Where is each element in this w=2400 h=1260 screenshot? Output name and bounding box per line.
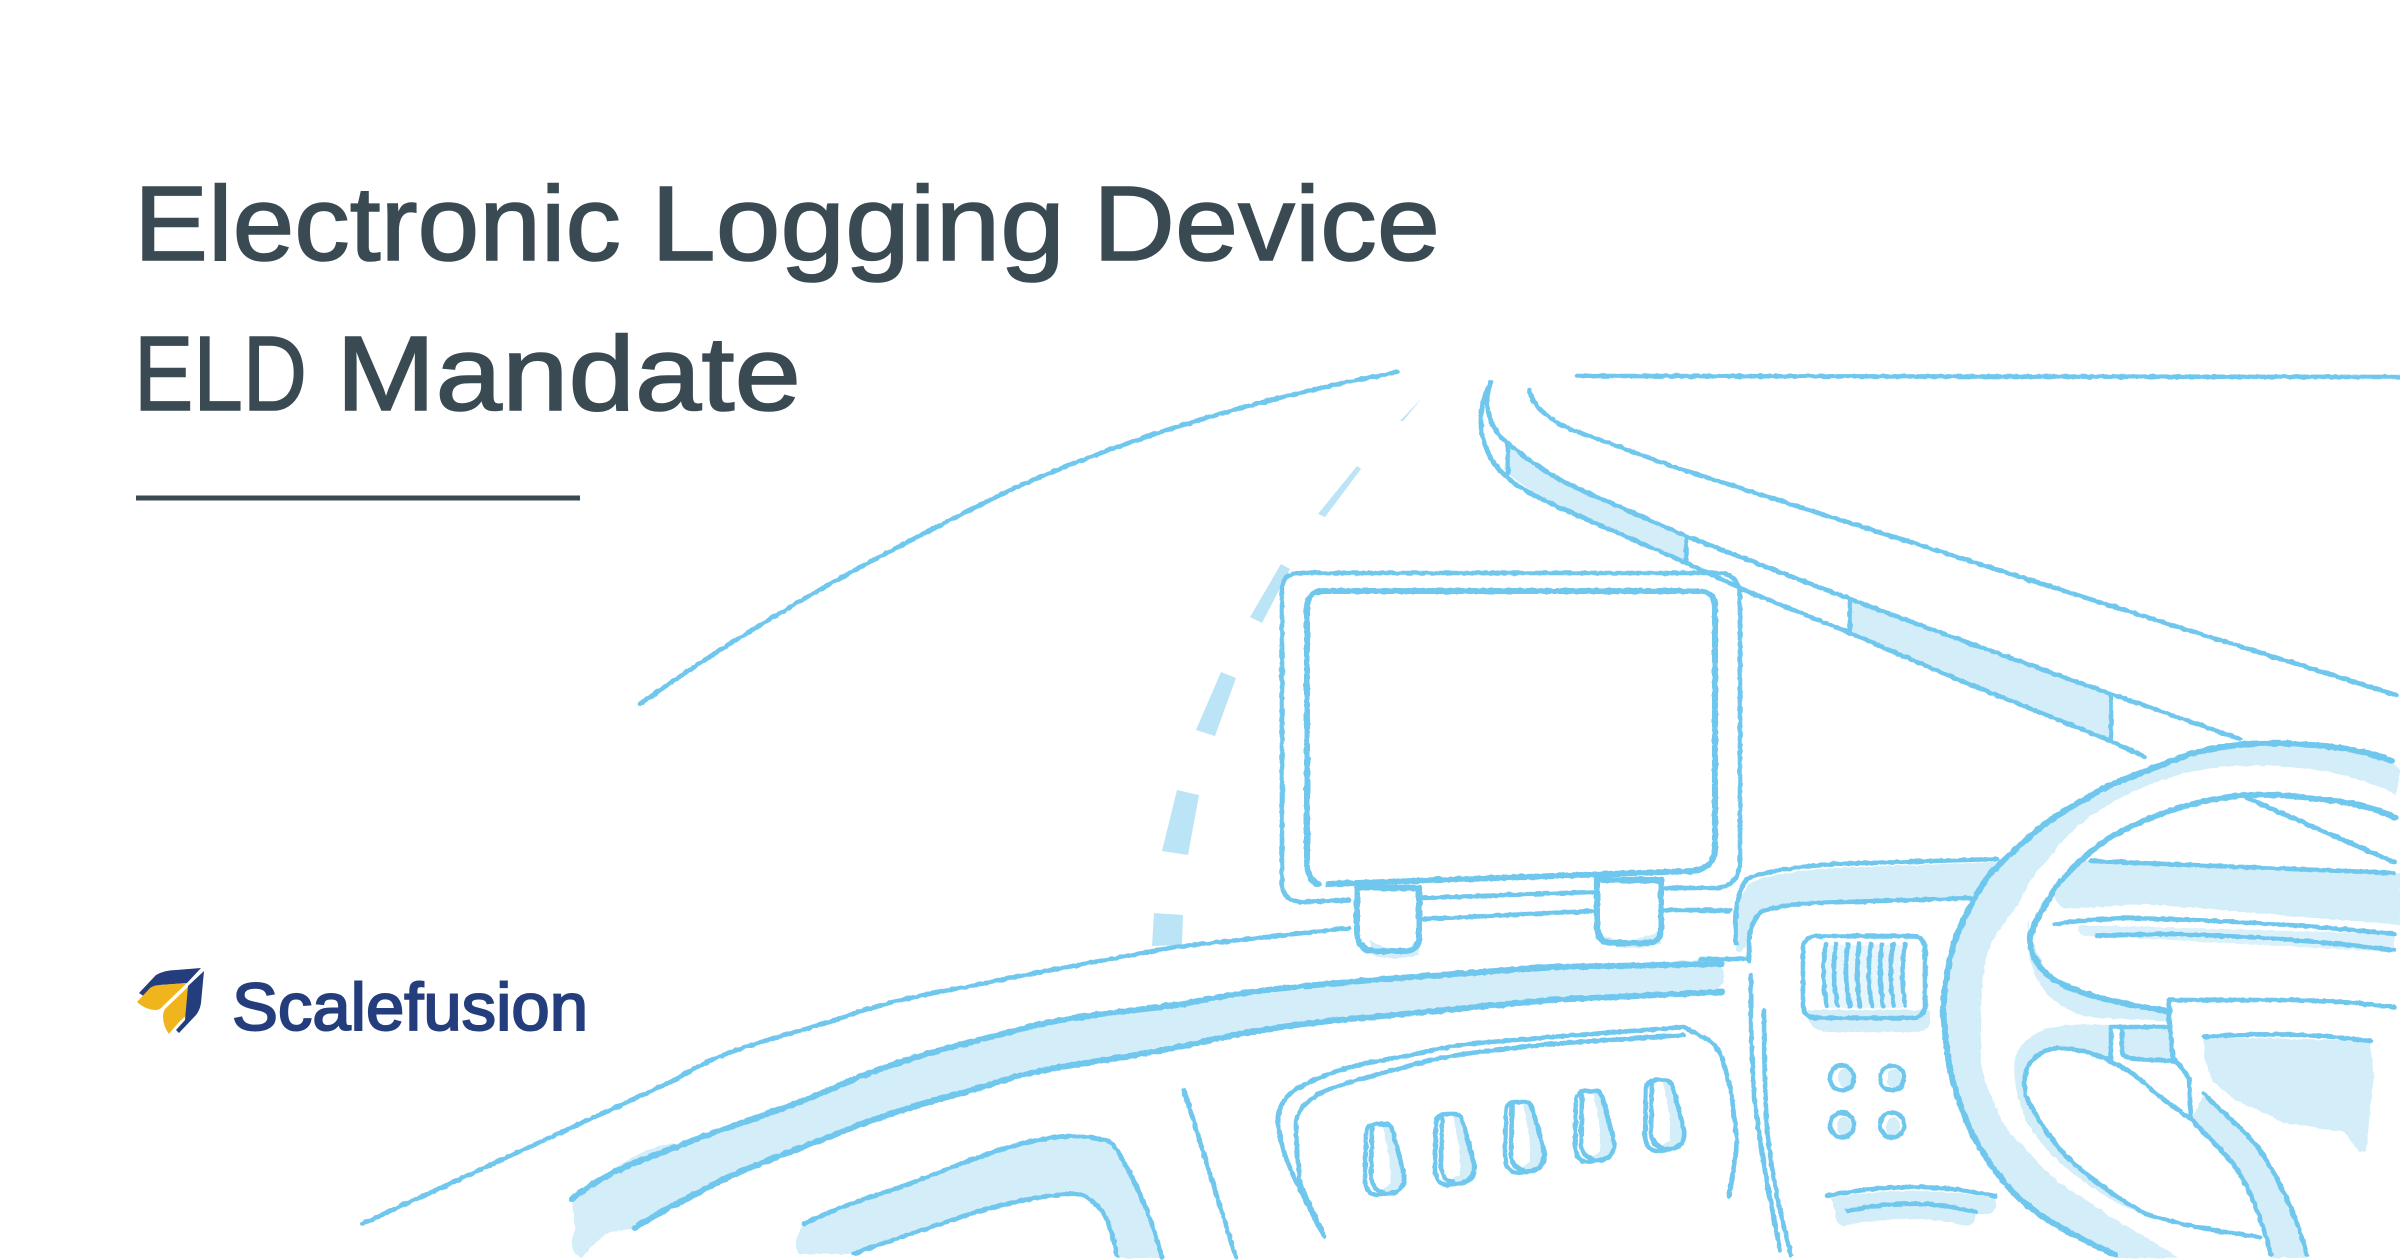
- title: Logging: [651, 165, 1065, 283]
- title: Device: [1093, 165, 1440, 283]
- dashboard: shaded band: [572, 960, 1724, 1258]
- dashboard: four round buttons: [1830, 1066, 1904, 1138]
- dashboard: lower curved slots: [1827, 1187, 1996, 1226]
- title: [134, 165, 1440, 433]
- steering wheel: inner opening: [2028, 795, 2396, 1021]
- dashboard: five switches: [1365, 1080, 1684, 1195]
- device: mount brackets: [1357, 880, 1730, 958]
- dashboard: upper edge: [362, 928, 1349, 1224]
- title: Electronic: [134, 165, 621, 283]
- cab: steering column and side panel: [2169, 1000, 2394, 1152]
- device: screen monitor: [1282, 573, 1740, 902]
- dashboard: vent panel outline: [1278, 1027, 1737, 1236]
- title: ELD: [134, 315, 307, 433]
- steering wheel: rim: [1943, 743, 2400, 1258]
- icon: logo mark: [137, 968, 204, 1034]
- dashboard: air vent grille: [1803, 936, 1930, 1032]
- road: left edge and horizon: [640, 372, 2400, 704]
- road: guard rail on right: [1481, 382, 2396, 757]
- illustration: road view from truck cab: [362, 372, 2400, 1258]
- dashboard: hood corner strip: [1700, 859, 1997, 1255]
- cab: right shaded bands: [2055, 861, 2400, 952]
- logo: Scalefusion: [137, 968, 588, 1045]
- title: Mandate: [336, 315, 801, 433]
- logo wordmark: Scalefusion: [232, 970, 588, 1045]
- road: centre dashes: [1152, 398, 1422, 946]
- title underline: [136, 496, 580, 500]
- steering wheel: lower spoke and hub: [2014, 1024, 2307, 1258]
- dashboard: lower left arch: [796, 1090, 1236, 1258]
